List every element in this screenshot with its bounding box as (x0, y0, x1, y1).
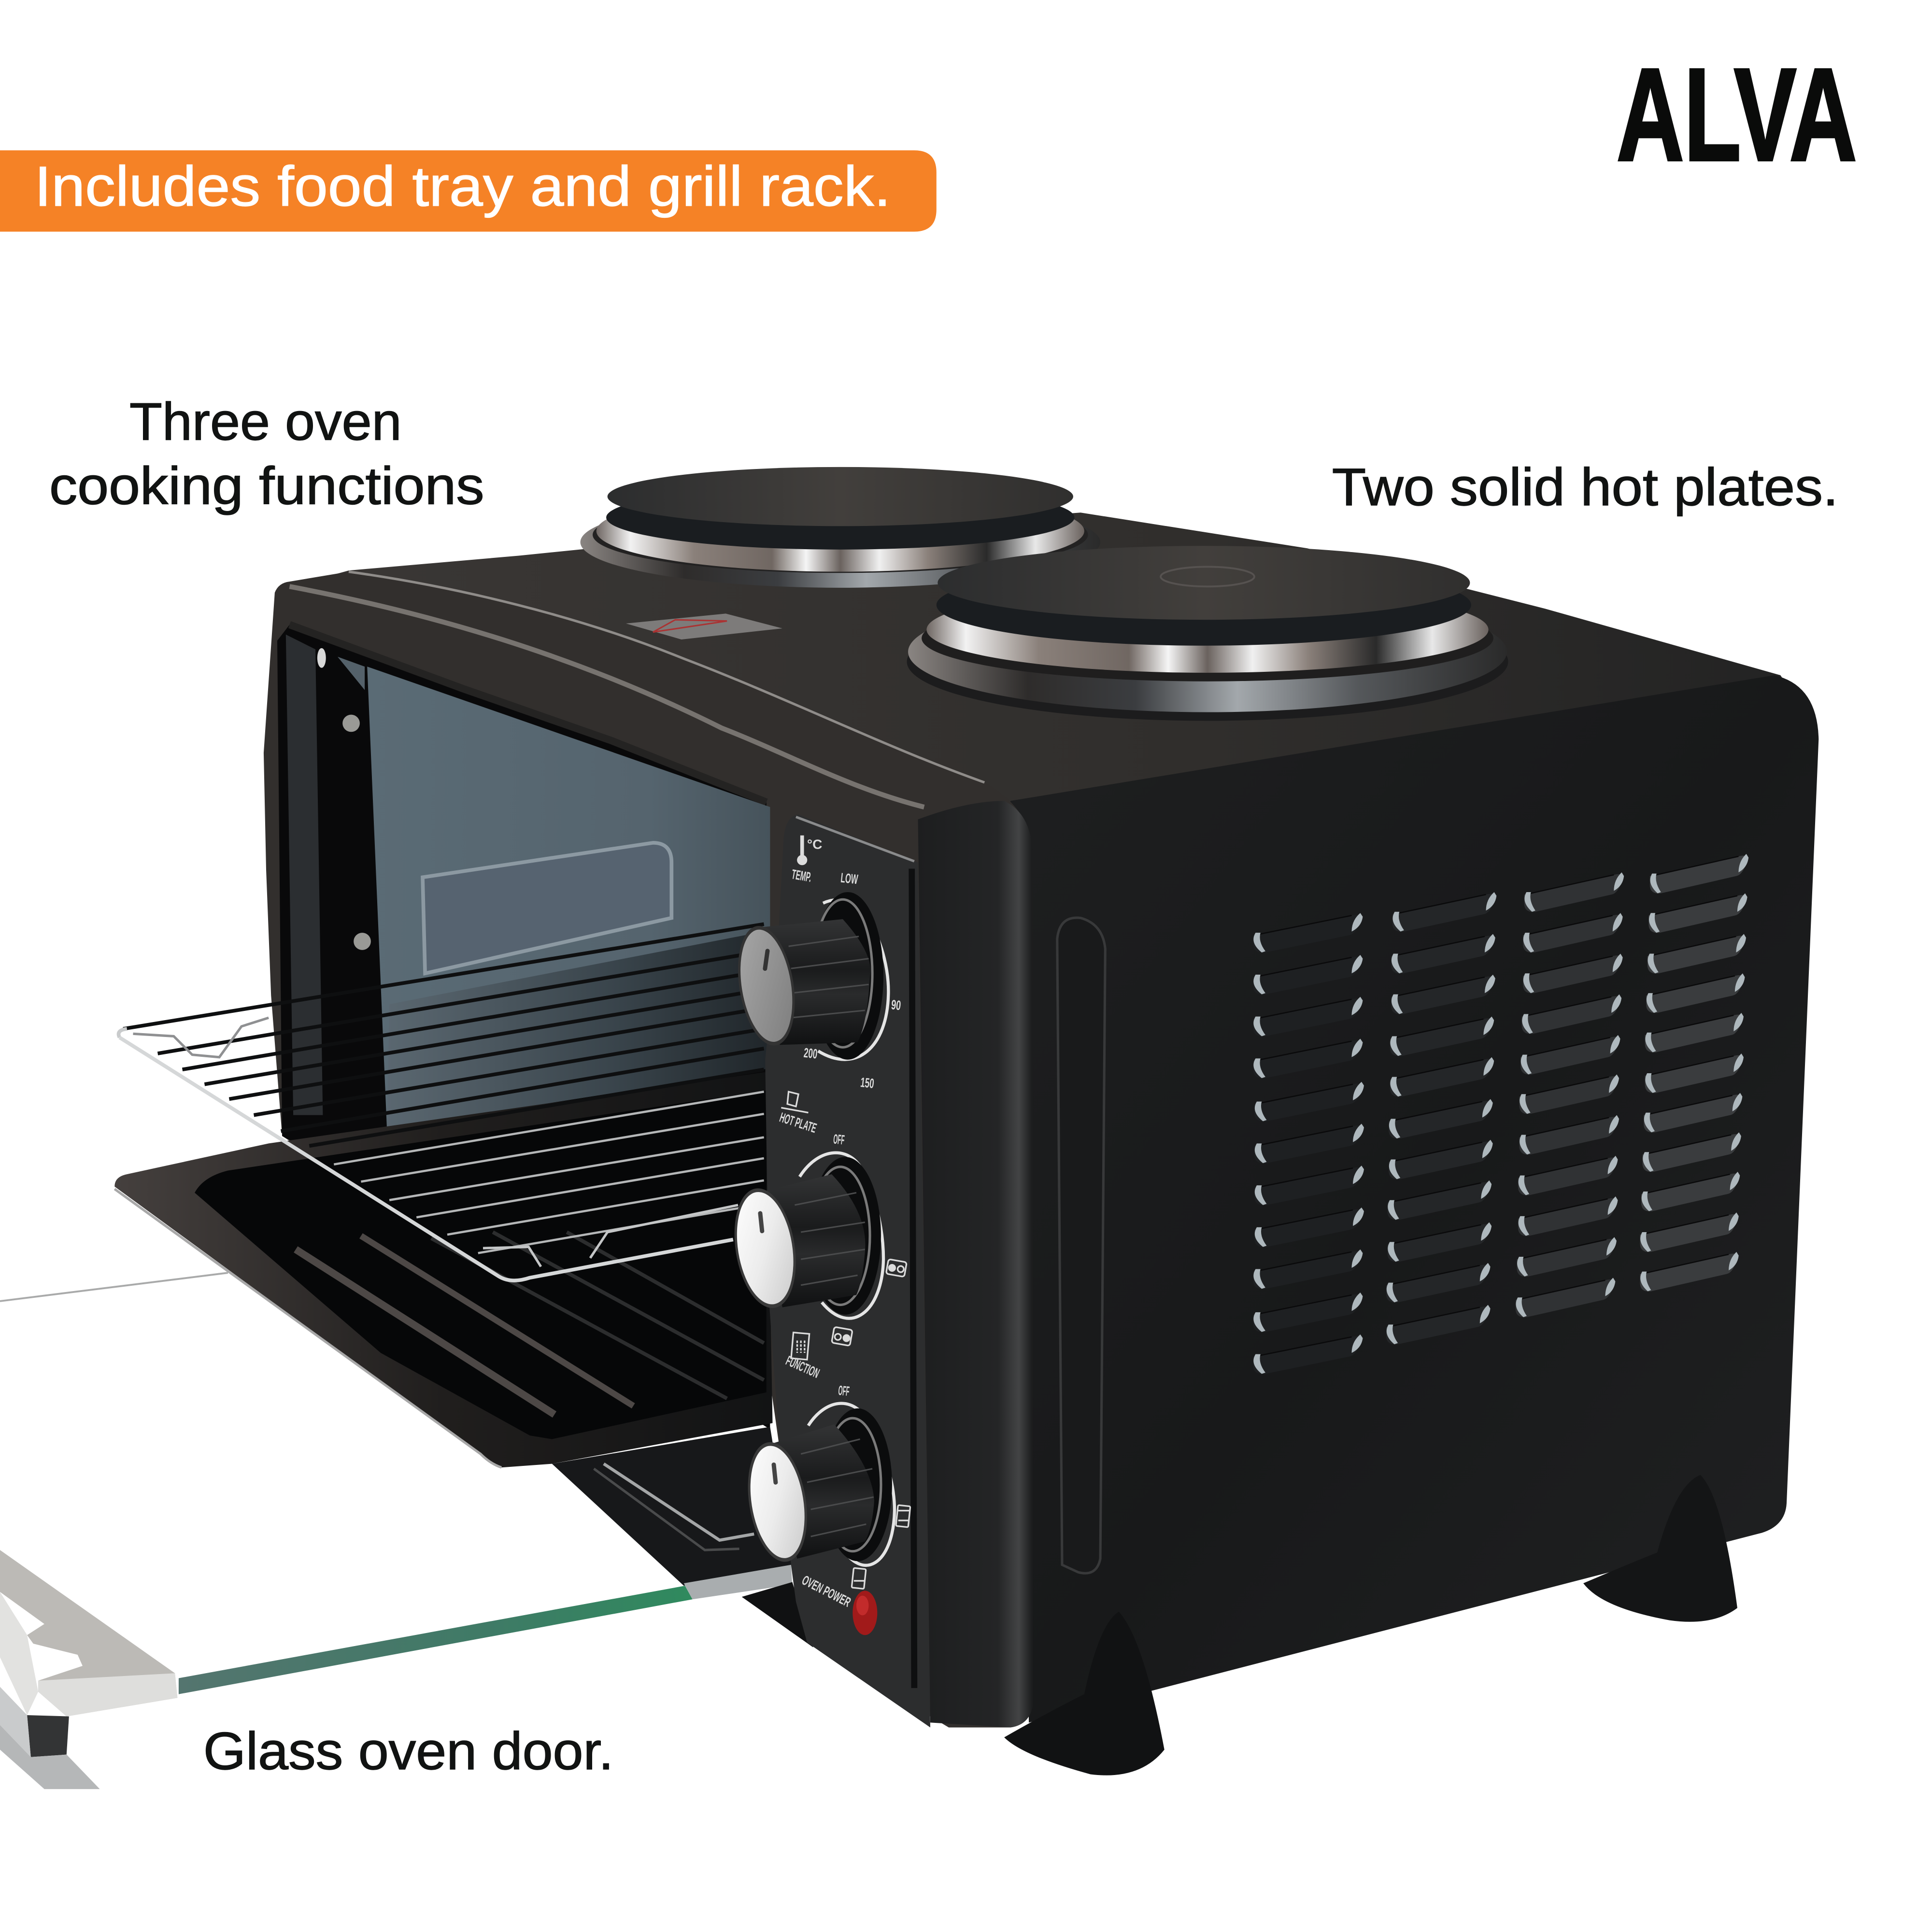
door top edge line (0, 1273, 228, 1301)
front foot (1004, 1612, 1165, 1776)
panel labels: 90 (891, 997, 902, 1013)
frame edge line (349, 572, 984, 782)
orange banner (0, 150, 937, 232)
panel labels: OVEN POWER (799, 1572, 853, 1610)
door inner frame (552, 1427, 792, 1586)
ventilation slots (1253, 854, 1748, 1374)
grill rack (119, 924, 764, 1280)
panel labels: FUNCTION (783, 1353, 822, 1381)
door metal clip (684, 1565, 792, 1599)
caption: glass oven door: Glass oven door. (203, 1722, 613, 1781)
panel labels: LOW (840, 870, 859, 887)
side groove (1057, 918, 1105, 1573)
panel labels: 150 (860, 1075, 875, 1091)
front hot plate (907, 546, 1508, 721)
panel labels: HOT PLATE (778, 1109, 819, 1136)
door bracket shadow (742, 1582, 813, 1648)
knob: function (740, 1404, 895, 1566)
left hinge bracket (0, 1550, 177, 1789)
power indicator light (852, 1591, 877, 1635)
oven illustration (0, 467, 1818, 1789)
selector icons (781, 836, 910, 1589)
door glass edge (179, 1586, 693, 1694)
panel labels: TEMP. (791, 867, 813, 885)
rear hot plate (581, 467, 1100, 588)
caption: three oven cooking functions: cooking functions (49, 456, 484, 515)
control panel (765, 814, 930, 1728)
oven top face (296, 512, 1799, 813)
caption: three oven cooking functions (49, 393, 484, 515)
knob: hot plate (726, 1153, 883, 1318)
front corner post (918, 801, 1033, 1728)
front frame (264, 572, 1033, 1728)
oven opening (277, 625, 770, 1429)
panel labels (778, 837, 902, 1610)
panel labels: OFF (833, 1132, 845, 1148)
knob: temperature (730, 892, 888, 1060)
side panel (1010, 675, 1818, 1722)
panel labels: °C (807, 837, 822, 852)
caption: two solid hot plates: Two solid hot plates. (1332, 458, 1838, 517)
frame ridge highlight (289, 586, 924, 807)
caption: three oven cooking functions: Three oven (129, 393, 402, 452)
orange banner: Includes food tray and grill rack. (34, 155, 891, 218)
food tray (114, 1072, 772, 1467)
rear foot (1583, 1475, 1737, 1622)
door frame chrome strip (604, 1464, 754, 1540)
door frame lower strip (594, 1469, 739, 1550)
rating sticker (626, 613, 782, 639)
panel labels: 200 (803, 1045, 818, 1062)
panel labels: OFF (838, 1383, 850, 1399)
